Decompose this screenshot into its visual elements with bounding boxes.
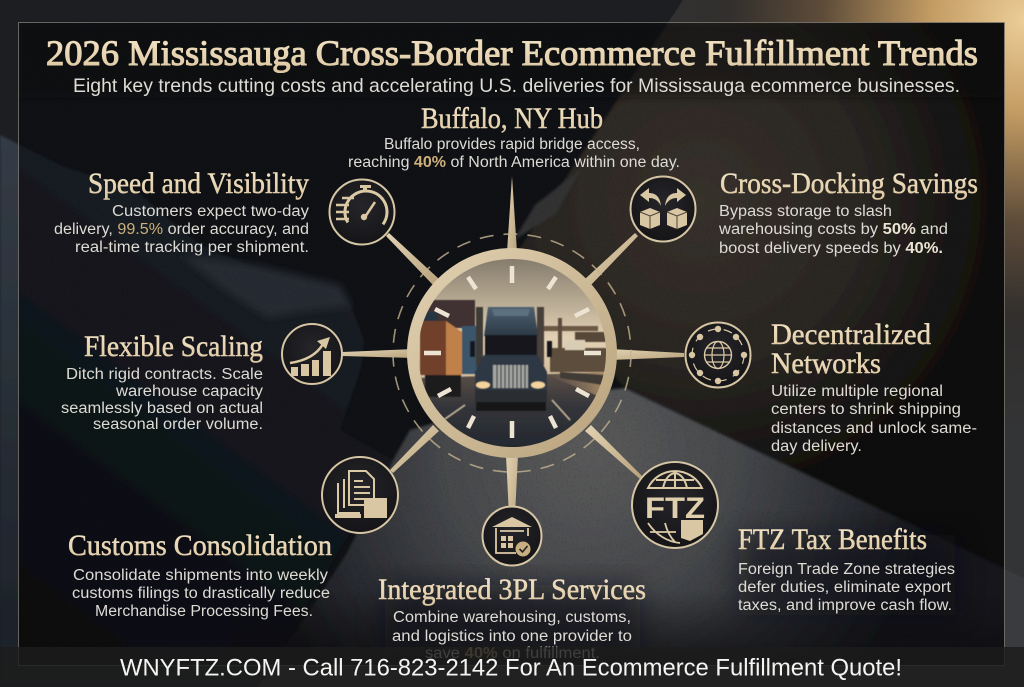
footer call-to-action band (0, 647, 1024, 687)
text block: Integrated 3PL Services: Combine warehousing, customs, (393, 609, 631, 626)
text block: Customs Consolidation: Consolidate shipments into weekly (73, 567, 328, 584)
text block: FTZ Tax Benefits: FTZ Tax Benefits (738, 523, 927, 556)
text block: Cross-Docking Savings: Bypass storage to slash (719, 203, 892, 220)
text block: Cross-Docking Savings (718, 167, 978, 257)
text block: Buffalo, NY Hub: Buffalo provides rapid bridge access, (384, 136, 640, 153)
text block: FTZ Tax Benefits (738, 523, 955, 614)
text block: Flexible Scaling: Flexible Scaling (84, 330, 263, 363)
text block: Speed and Visibility (54, 167, 309, 256)
truck scene (419, 299, 606, 447)
footer call-to-action band: WNYFTZ.COM - Call 716-823-2142 For An Ecommerce Fulfillment Quote! (120, 654, 902, 682)
title: 2026 Mississauga Cross-Border Ecommerce Fulfillment Trends (46, 33, 978, 73)
text block: Flexible Scaling: seamlessly based on actual (61, 400, 263, 417)
text block: Speed and Visibility: real-time tracking per shipment. (75, 239, 309, 256)
text block: Flexible Scaling (61, 330, 263, 433)
icon: cross-docking boxes (630, 176, 696, 242)
text block: Speed and Visibility: delivery, 99.5% order accuracy, and (54, 221, 309, 238)
text block: Buffalo, NY Hub (348, 102, 680, 171)
icon: FTZ globe: FTZ (645, 492, 705, 525)
text block: Speed and Visibility: Customers expect two-day (112, 203, 309, 220)
text block: FTZ Tax Benefits: defer duties, eliminate export (738, 579, 952, 596)
icon: network globe (686, 322, 750, 388)
text block: Customs Consolidation: Customs Consolidation (68, 529, 332, 562)
dashed orbit ring (393, 234, 631, 472)
text block: Flexible Scaling: warehouse capacity (115, 383, 263, 400)
text block: Buffalo, NY Hub: reaching 40% of North America within one day. (348, 154, 680, 171)
icon: warehouse with badge (482, 506, 542, 566)
icon: stopwatch (330, 180, 395, 244)
text block: Customs Consolidation: Merchandise Processing Fees. (95, 603, 313, 620)
icon: rising bar chart (282, 324, 342, 384)
text block: Decentralized Networks: Decentralized (771, 318, 931, 351)
text block: Buffalo, NY Hub: Buffalo, NY Hub (421, 102, 603, 135)
text block: Decentralized Networks (771, 318, 977, 455)
text block: Decentralized Networks: Networks (771, 347, 881, 380)
text block: Decentralized Networks: centers to shrink shipping (771, 401, 961, 418)
text block: Integrated 3PL Services: save 40% on fulfillment. (425, 645, 600, 662)
text block: Customs Consolidation: customs filings to drastically reduce (72, 585, 330, 602)
text block: FTZ Tax Benefits: Foreign Trade Zone strategies (738, 561, 955, 578)
text block: Decentralized Networks: distances and unlock same- (771, 420, 977, 437)
icon: customs documents (322, 457, 398, 533)
text block: Integrated 3PL Services: Integrated 3PL Services (378, 573, 646, 606)
text block: Customs Consolidation (68, 529, 332, 620)
text block: FTZ Tax Benefits: taxes, and improve cash flow. (738, 597, 952, 614)
text block: Decentralized Networks: day delivery. (771, 438, 862, 455)
clock ticks (424, 266, 601, 438)
central hub: truck medallion (407, 248, 620, 458)
text block: Integrated 3PL Services (378, 573, 646, 662)
text block: Speed and Visibility: Speed and Visibility (88, 167, 309, 200)
text block: Cross-Docking Savings: warehousing costs by 50% and (718, 221, 948, 238)
subtitle: Eight key trends cutting costs and accelerating U.S. deliveries for Mississauga ecommerce businesses. (73, 75, 960, 97)
text block: Flexible Scaling: Ditch rigid contracts. Scale (66, 366, 263, 383)
text block: Cross-Docking Savings: boost delivery speeds by 40%. (719, 240, 943, 257)
hub-and-spoke connectors (342, 176, 684, 536)
icon: FTZ globe (632, 462, 718, 548)
text block: Flexible Scaling: seasonal order volume. (93, 416, 263, 433)
text block: Decentralized Networks: Utilize multiple regional (771, 383, 943, 400)
text block: Cross-Docking Savings: Cross-Docking Savings (720, 167, 978, 200)
text block: Integrated 3PL Services: and logistics into one provider to (392, 628, 632, 645)
